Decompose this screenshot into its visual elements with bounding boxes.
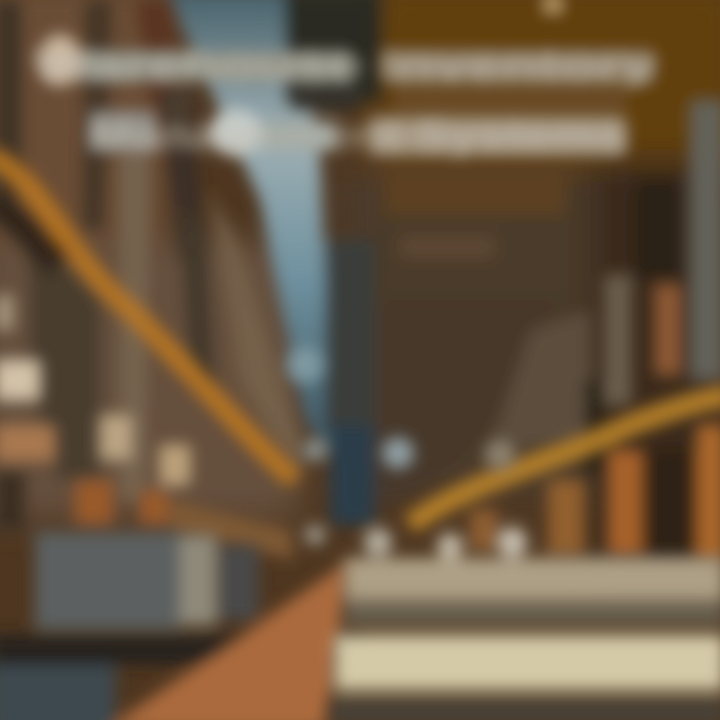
- orange rail left: [0, 155, 295, 480]
- aisle: distant blue light: [165, 0, 565, 525]
- title: [35, 45, 655, 157]
- orange rail right: [410, 395, 720, 560]
- title band highlights: [40, 35, 653, 154]
- left shelving uprights: [0, 0, 300, 500]
- title line 1: Warehouse Inventory: [35, 45, 655, 87]
- title line 2: Management Systems: [90, 115, 625, 157]
- right shelving uprights: [490, 100, 720, 470]
- floor walkway: [105, 560, 350, 720]
- ceiling light: [542, 0, 564, 15]
- right lower white shelves: [287, 347, 720, 720]
- left lower stock and boxes: [0, 295, 360, 720]
- grey box pallet: [35, 532, 258, 630]
